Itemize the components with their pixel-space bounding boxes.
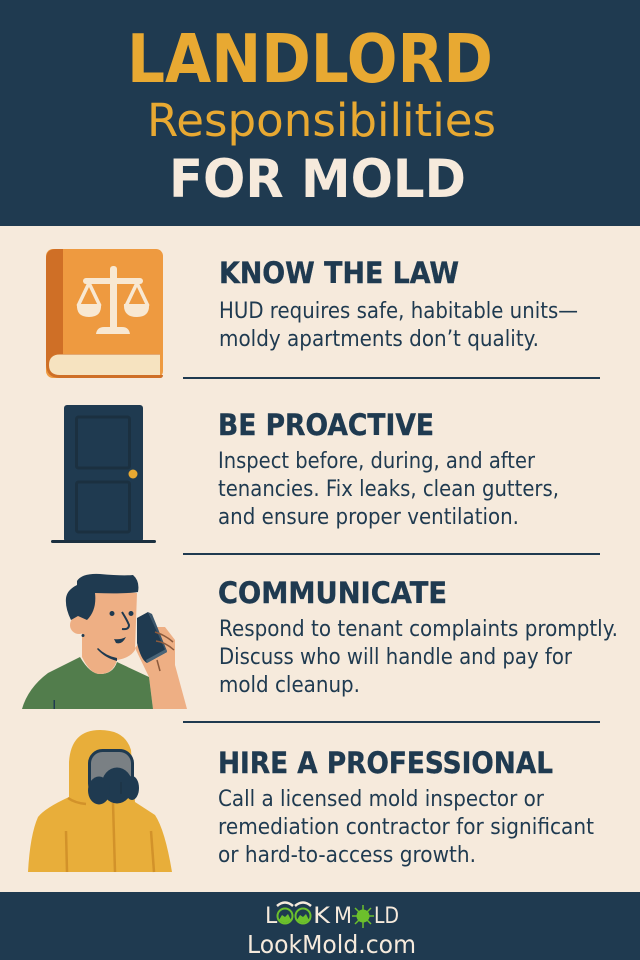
icon: law book with scales (46, 249, 163, 378)
section heading: communicate: COMMUNICATE (218, 576, 447, 610)
subtitle: Responsibilities: Responsibilities (147, 94, 496, 147)
gas mask (90, 750, 132, 796)
footer banner (0, 892, 640, 960)
text block: hire a professional: Call a licensed mold inspector or (218, 787, 545, 812)
text block: know the law (219, 299, 578, 352)
text block: hire a professional: or hard-to-access growth. (218, 843, 476, 868)
website url: LookMold.com (247, 930, 416, 959)
logo: Look Mold (265, 902, 399, 929)
suit (28, 730, 172, 872)
text block: be proactive: Inspect before, during, and after (218, 449, 536, 474)
neck and face (82, 590, 137, 674)
icon: man on phone (22, 574, 187, 709)
face features (54, 611, 134, 709)
hair (66, 574, 138, 620)
icon: door (51, 405, 156, 543)
title: FOR MOLD: FOR MOLD (169, 149, 466, 210)
header banner (0, 0, 640, 226)
text block: communicate: Discuss who will handle and pay for (219, 645, 573, 670)
icon: person in protective suit (28, 730, 172, 872)
text block: be proactive: tenancies. Fix leaks, clean gutters, (218, 477, 559, 502)
text block: communicate: mold cleanup. (219, 673, 360, 698)
arm (135, 627, 187, 709)
scales of justice (77, 266, 149, 334)
title: LANDLORD: LANDLORD (127, 20, 493, 98)
logo: Look Mold: LD (374, 904, 399, 929)
section heading: hire a professional: HIRE A PROFESSIONAL (218, 746, 553, 780)
logo: Look Mold: M (334, 904, 352, 929)
suit seams (66, 798, 154, 872)
logo: Look Mold: K (313, 904, 331, 929)
shirt (22, 657, 153, 709)
phone (137, 612, 167, 663)
text block: know the law: HUD requires safe, habitable units— (219, 299, 578, 324)
text block: hire a professional (218, 787, 594, 868)
text block: know the law: moldy apartments don’t quality. (219, 327, 539, 352)
fingers (155, 632, 174, 650)
text block: hire a professional: remediation contractor for significant (218, 815, 594, 840)
text block: be proactive (218, 449, 559, 530)
section heading: be proactive: BE PROACTIVE (218, 408, 434, 442)
text block: be proactive: and ensure proper ventilation. (218, 505, 519, 530)
section heading: know the law: KNOW THE LAW (219, 256, 459, 290)
text block: communicate (219, 617, 618, 698)
logo: Look Mold: L (265, 904, 278, 929)
